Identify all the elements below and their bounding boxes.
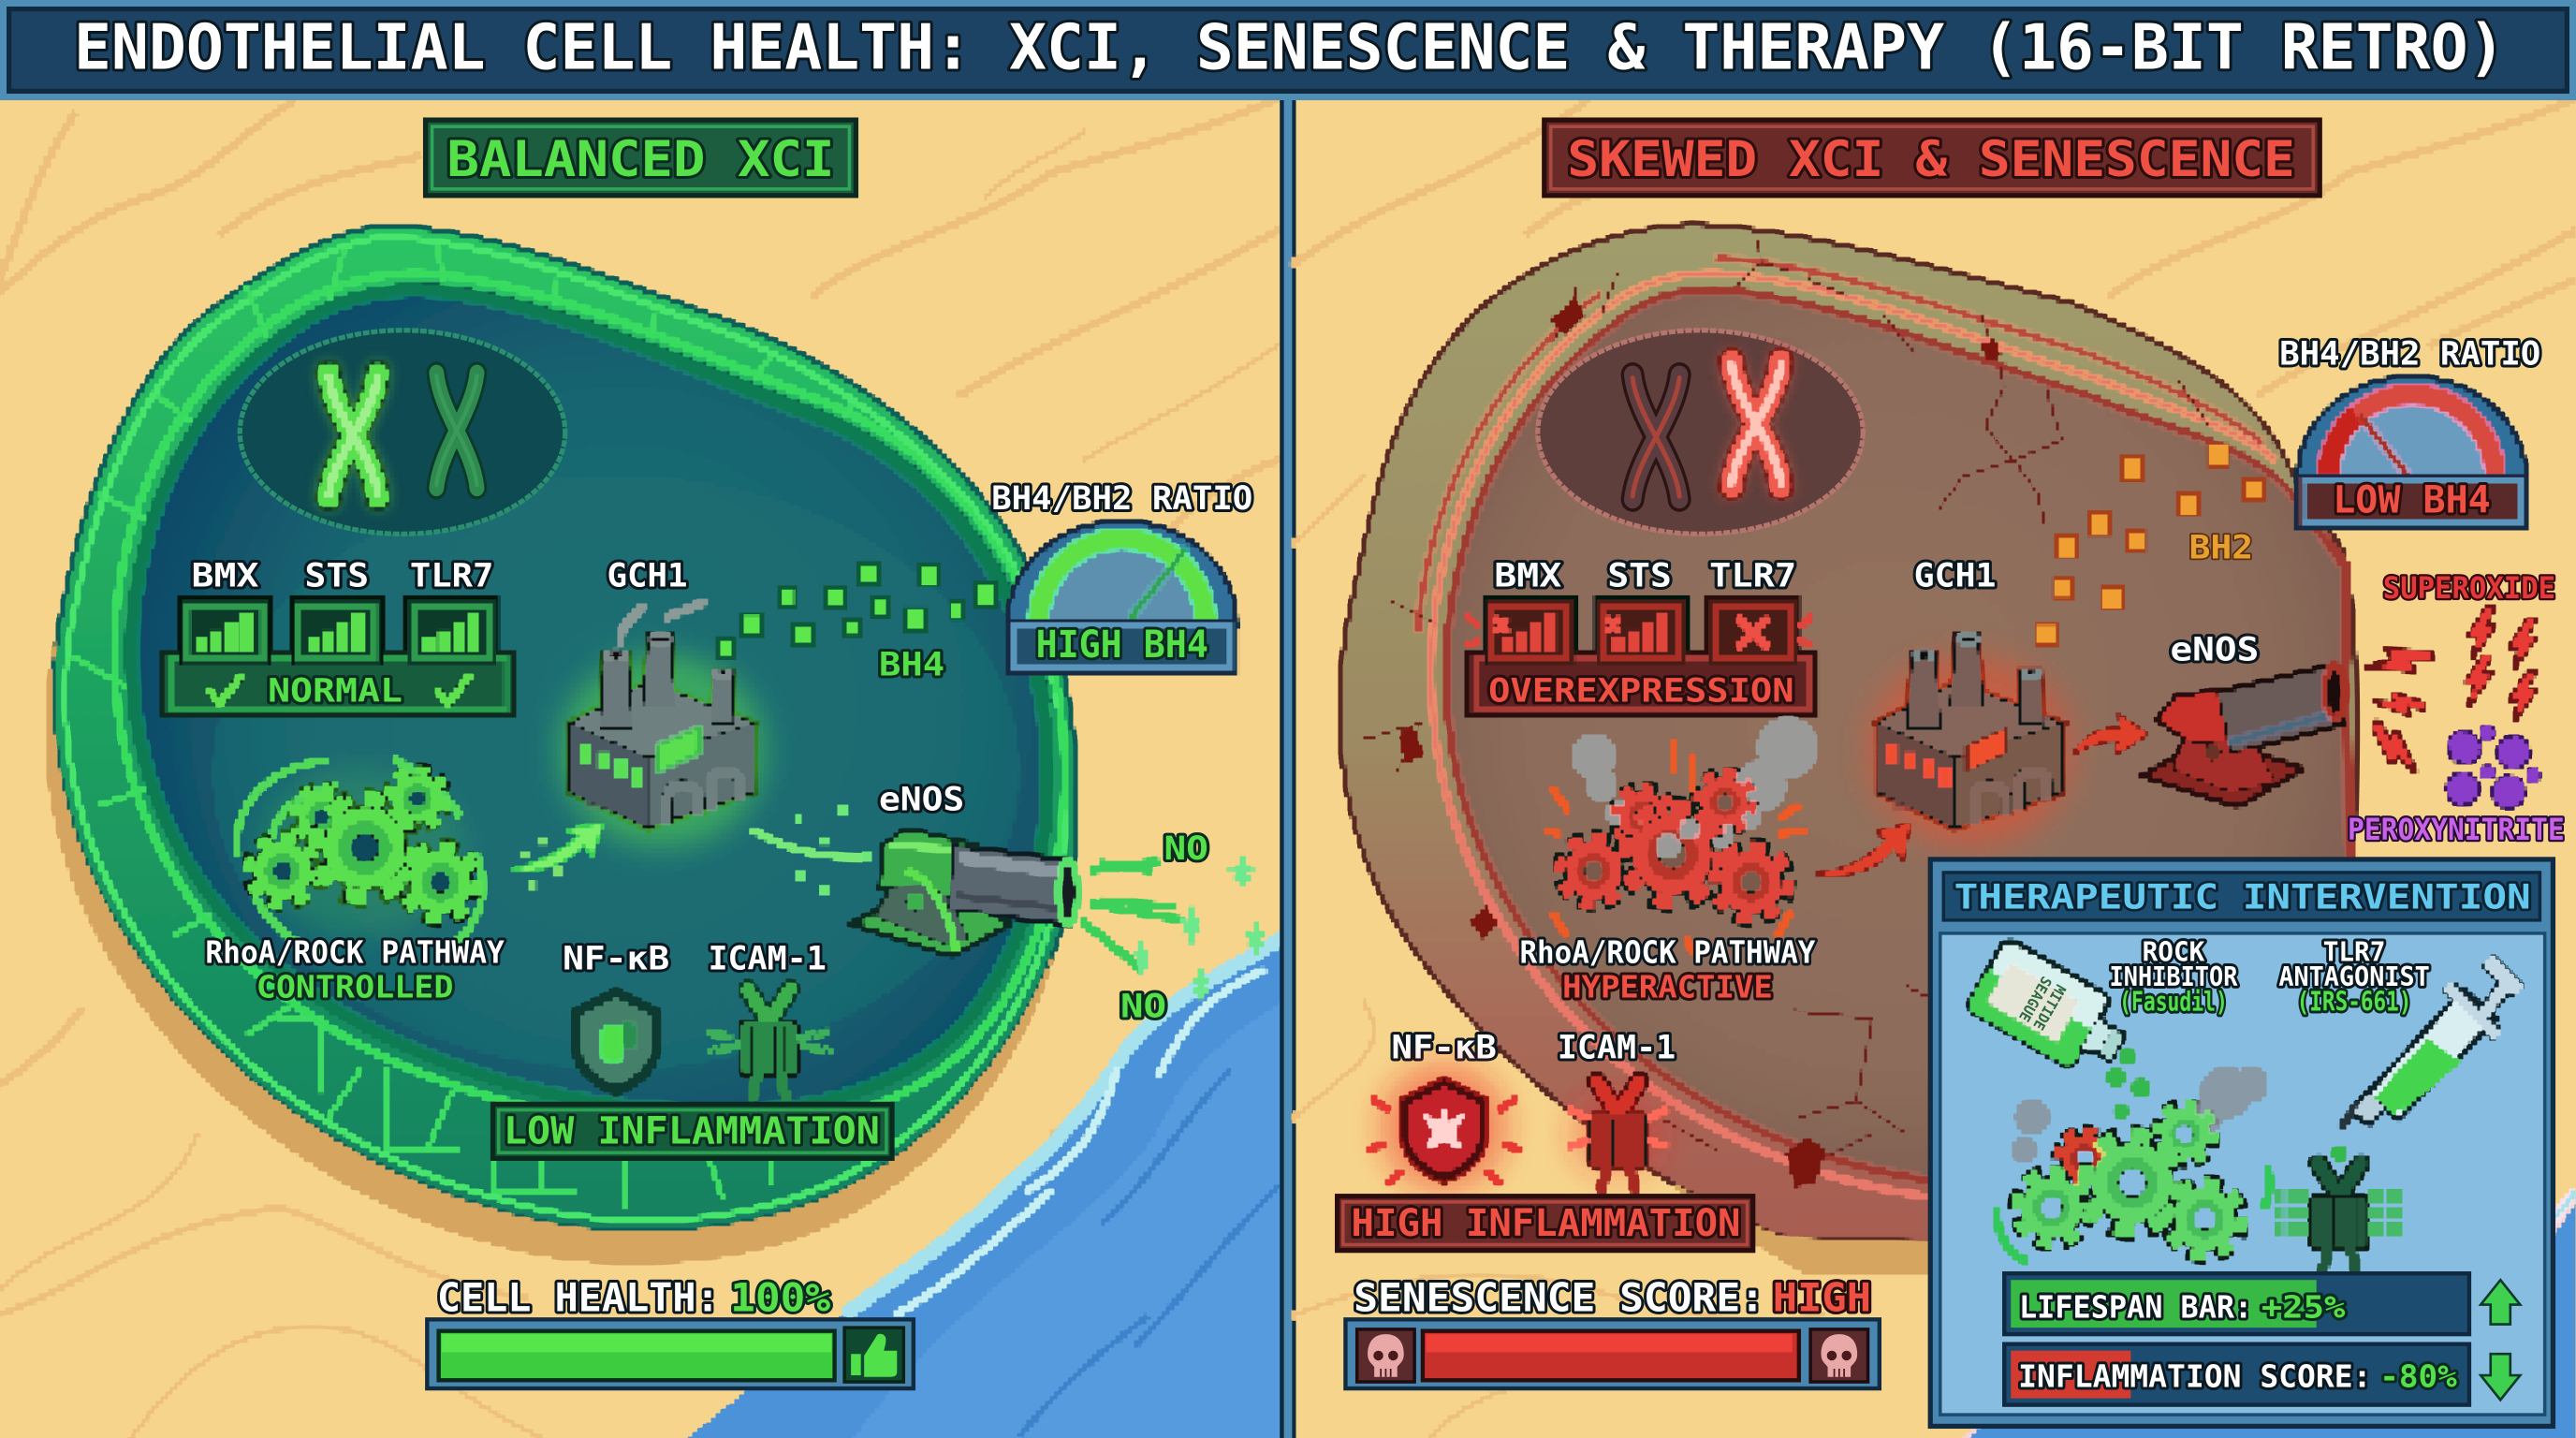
label: TLR7 antagonist: ANTAGONIST xyxy=(2278,961,2430,992)
label: TLR7 antagonist xyxy=(2278,937,2430,1017)
banner: balanced XCI xyxy=(426,120,856,196)
icon: damaged X chromosome xyxy=(1632,374,1679,500)
cell: healthy endothelial cell body xyxy=(46,227,1076,1263)
icon: skulls xyxy=(1357,1329,1868,1382)
label: rock inhibitor xyxy=(2110,937,2238,1017)
arrow: sparkles toward eNOS xyxy=(753,805,871,896)
icon: ICAM-1 receptor quiet xyxy=(707,940,831,1096)
senescence score bar xyxy=(1345,1275,1880,1388)
arrow: gears to factory damaged xyxy=(1817,825,1909,874)
pathway: RhoA/ROCK gears controlled xyxy=(205,759,505,1005)
icon: repaired gears with droplets xyxy=(1998,1050,2270,1262)
BH2 particles xyxy=(2037,446,2262,644)
icon: eNOS cannon healthy: eNOS xyxy=(879,780,964,818)
icon: GCH1 factory damaged: GCH1 xyxy=(1914,557,1996,595)
BH4 particles flow: BH4 xyxy=(879,645,944,683)
label text on bottle: MITIDE xyxy=(2029,981,2070,1034)
arrow: gears activate factory xyxy=(513,825,601,889)
gauge: high BH4/BH2 ratio: BH4/BH2 RATIO xyxy=(991,479,1252,518)
icon: eNOS cannon uncoupled: eNOS xyxy=(2170,631,2259,669)
superoxide bolts xyxy=(2363,572,2555,776)
peroxynitrite clusters: PEROXYNITRITE xyxy=(2348,814,2565,847)
gene status panel: BMX STS TLR7 normal: TLR7 xyxy=(410,557,493,595)
inflammation bar -80% xyxy=(2004,1344,2469,1405)
title bar: ENDOTHELIAL CELL HEALTH: XCI, SENESCENCE & THERAPY (16-BIT RETRO) xyxy=(74,11,2506,84)
icon: syringe xyxy=(2341,961,2519,1127)
superoxide bolts: SUPEROXIDE xyxy=(2383,572,2555,606)
icon: NF-kB shield alarmed xyxy=(1368,1028,1519,1190)
divider between panels xyxy=(1280,95,1296,1438)
ocean shoreline left xyxy=(690,936,1284,1438)
icon: blocked receptor xyxy=(2277,1147,2402,1270)
health bar: cell health 100%: 100% xyxy=(730,1275,831,1321)
lifespan bar +25%: +25% xyxy=(2261,1289,2345,1326)
banner: balanced XCI: BALANCED XCI xyxy=(446,131,835,188)
pathway: RhoA/ROCK gears controlled: RhoA/ROCK PATHWAY xyxy=(205,933,505,970)
gauge: high BH4/BH2 ratio: HIGH BH4 xyxy=(1036,623,1208,667)
label text on bottle: SEAGUE xyxy=(2015,974,2056,1025)
label: TLR7 antagonist: (IRS-661) xyxy=(2297,986,2411,1017)
health bar: cell health 100% xyxy=(427,1275,914,1388)
label text on bottle xyxy=(2015,974,2070,1034)
icon: ICAM-1 receptor quiet: ICAM-1 xyxy=(708,940,827,978)
icon: GCH1 factory healthy xyxy=(560,557,764,846)
sand beach background left xyxy=(0,95,1284,1438)
banner: skewed XCI and senescence xyxy=(1544,120,2320,196)
icon: ICAM-1 receptor alarmed: ICAM-1 xyxy=(1558,1028,1676,1066)
icon: Fasudil bottle xyxy=(1968,939,2137,1082)
icon: thumbs up xyxy=(844,1328,903,1382)
BH4 particles flow xyxy=(720,565,996,683)
heading: therapeutic intervention: THERAPEUTIC INTERVENTION xyxy=(1954,877,2531,917)
gauge: low BH4/BH2 ratio xyxy=(2279,335,2540,527)
senescence score bar: HIGH xyxy=(1773,1275,1871,1321)
arrow: factory to cannon xyxy=(2075,716,2145,753)
lifespan bar +25% xyxy=(2004,1273,2469,1334)
senescence score bar: SENESCENCE SCORE: xyxy=(1354,1275,1764,1321)
panel: therapeutic intervention xyxy=(1930,859,2553,1426)
icon: active X chromosome xyxy=(329,373,378,498)
gene status panel: overexpression: BMX xyxy=(1494,557,1561,595)
icon: eNOS cannon uncoupled xyxy=(2145,631,2345,805)
icon: inactive X chromosome xyxy=(436,373,477,488)
panel: skewed XCI senescent cell scene xyxy=(1296,95,2576,1438)
lifespan bar +25%: LIFESPAN BAR: xyxy=(2019,1289,2252,1326)
icon: ICAM-1 receptor alarmed xyxy=(1558,1028,1676,1188)
cell: senescent cracked cell body xyxy=(1340,225,2355,1273)
gene status panel: BMX STS TLR7 normal: STS xyxy=(305,557,369,595)
icon: arrow up xyxy=(2481,1280,2520,1325)
inflammation bar -80%: -80% xyxy=(2379,1357,2457,1394)
icon: NF-kB shield quiet xyxy=(563,940,669,1091)
gene status panel: BMX STS TLR7 normal: BMX xyxy=(191,557,258,595)
inflammation bar -80%: INFLAMMATION SCORE: xyxy=(2018,1357,2371,1394)
gene status panel: overexpression: STS xyxy=(1607,557,1672,595)
nitric oxide release NO: NO xyxy=(1164,829,1208,868)
nucleus with skewed X chromosomes xyxy=(1538,330,1863,534)
gauge: low BH4/BH2 ratio: LOW BH4 xyxy=(2333,478,2491,522)
panel: balanced XCI healthy cell scene xyxy=(0,95,1284,1438)
pathway: RhoA/ROCK gears hyperactive: HYPERACTIVE xyxy=(1562,968,1773,1005)
gene status panel: overexpression: TLR7 xyxy=(1709,557,1796,595)
gene status panel: overexpression: OVEREXPRESSION xyxy=(1488,671,1794,710)
health bar: cell health 100%: CELL HEALTH: xyxy=(437,1275,720,1321)
status badge: low inflammation: LOW INFLAMMATION xyxy=(504,1109,880,1153)
icon: arrow down xyxy=(2481,1354,2520,1400)
label: rock inhibitor: (Fasudil) xyxy=(2119,986,2228,1017)
icon: NF-kB shield alarmed: NF-κB xyxy=(1392,1028,1497,1066)
gene status panel: overexpression xyxy=(1467,557,1815,714)
icon: eNOS cannon healthy xyxy=(855,780,1077,955)
status badge: high inflammation: HIGH INFLAMMATION xyxy=(1352,1201,1741,1245)
gauge: low BH4/BH2 ratio: BH4/BH2 RATIO xyxy=(2279,335,2540,374)
nitric oxide release NO: NO xyxy=(1120,987,1166,1025)
peroxynitrite clusters xyxy=(2348,726,2565,847)
label: TLR7 antagonist: TLR7 xyxy=(2323,937,2385,968)
icon: GCH1 factory healthy: GCH1 xyxy=(607,557,688,595)
pathway: RhoA/ROCK gears hyperactive: RhoA/ROCK PATHWAY xyxy=(1519,933,1815,970)
banner: skewed XCI and senescence: SKEWED XCI & SENESCENCE xyxy=(1567,131,2295,188)
gauge: high BH4/BH2 ratio xyxy=(991,479,1252,672)
sand beach background right xyxy=(1296,95,2576,1438)
icon: GCH1 factory damaged xyxy=(1868,557,2071,846)
nucleus with balanced X chromosomes xyxy=(240,330,565,534)
title bar xyxy=(0,0,2576,100)
icon: overactive X chromosome xyxy=(1732,361,1781,487)
icon: NF-kB shield quiet: NF-κB xyxy=(563,940,669,978)
label: rock inhibitor: ROCK xyxy=(2143,937,2204,968)
gene status panel: BMX STS TLR7 normal xyxy=(165,557,513,714)
gene status panel: BMX STS TLR7 normal: NORMAL xyxy=(268,671,402,710)
label: rock inhibitor: INHIBITOR xyxy=(2110,961,2238,992)
nitric oxide release NO xyxy=(1081,829,1262,1025)
BH2 particles: BH2 xyxy=(2189,529,2253,567)
pathway: RhoA/ROCK gears controlled: CONTROLLED xyxy=(256,968,453,1005)
pathway: RhoA/ROCK gears hyperactive xyxy=(1519,718,1817,1005)
